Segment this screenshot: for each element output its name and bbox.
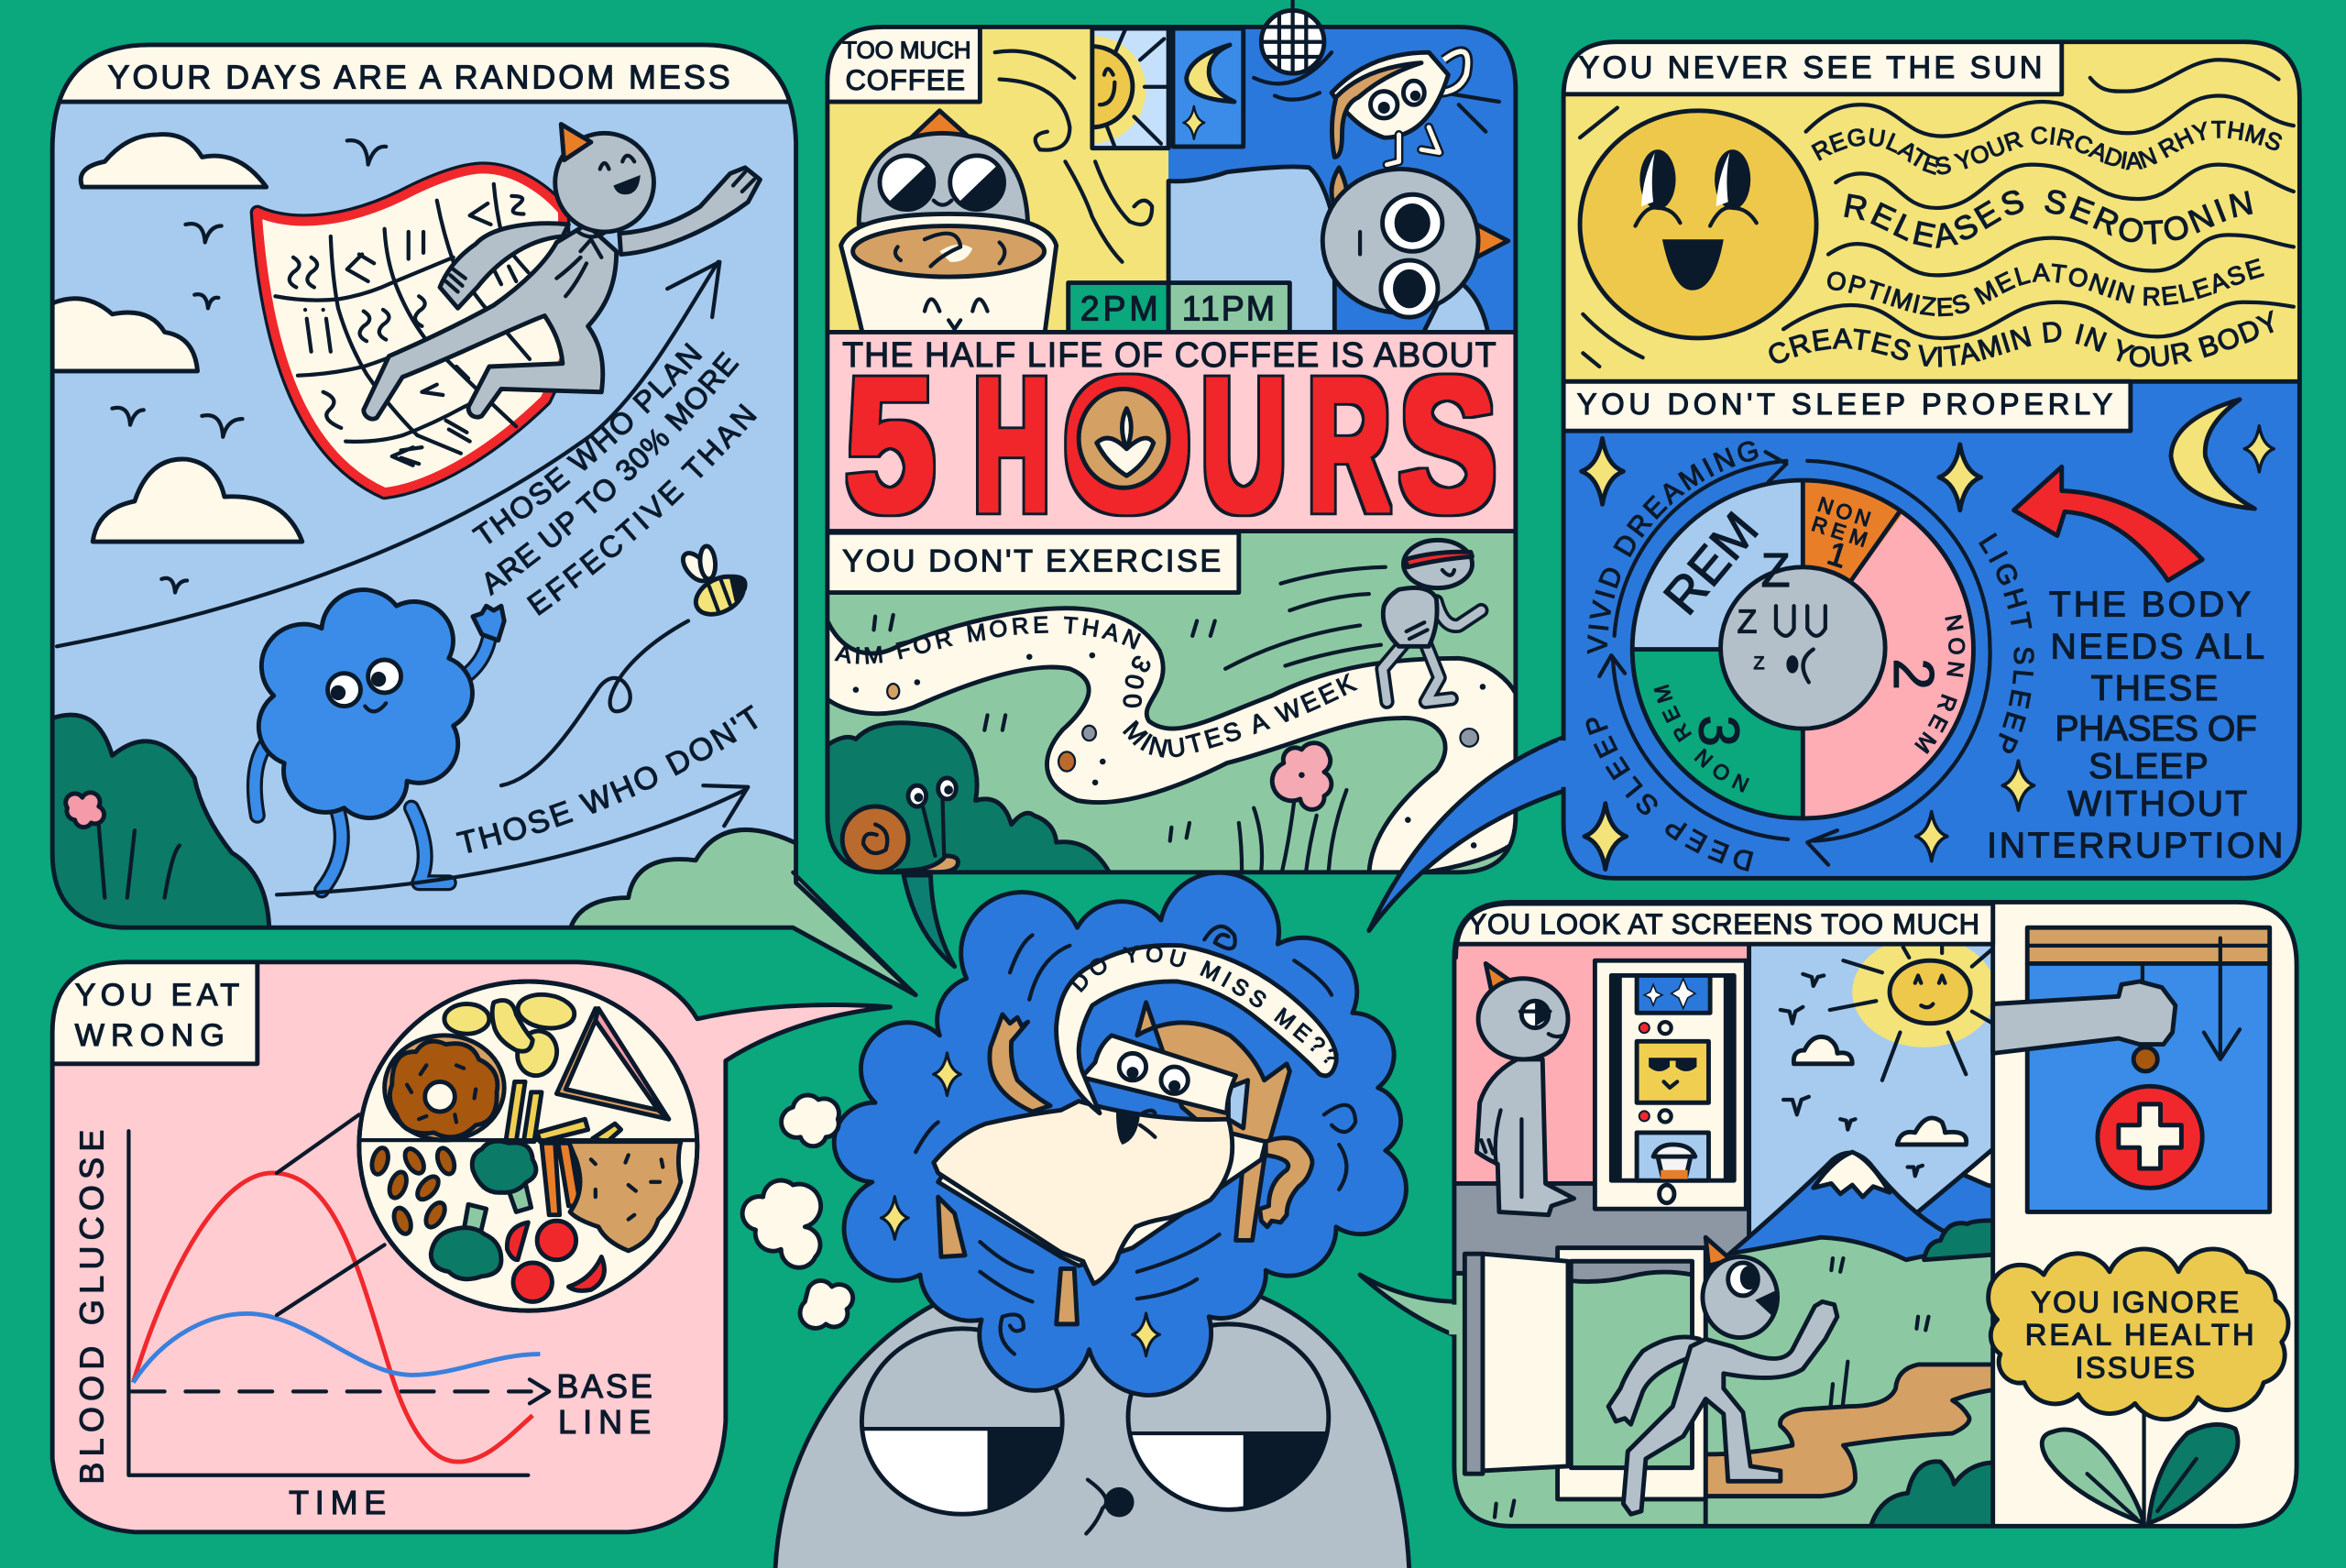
cycle labels — [1580, 435, 2038, 876]
grass ticks — [1495, 1258, 1928, 1517]
night side — [1168, 22, 1520, 332]
window blind — [2027, 927, 2270, 1212]
swirls and motion lines — [915, 927, 1355, 1354]
sun rays: wavy lines — [1580, 60, 2294, 367]
mountains — [1729, 1149, 2005, 1272]
text: the body needs all these phases: THE BODY — [2049, 586, 2251, 625]
blanket — [1168, 167, 1334, 336]
sun facts: CREATES VITAMIN D IN YOUR BODY — [1769, 310, 2275, 367]
pillow — [1081, 1036, 1236, 1113]
sleep cycle wheel: NON — [1814, 492, 1873, 532]
header: you eat wrong: WRONG — [75, 1018, 225, 1053]
callout: you ignore real health issues: ISSUES — [2075, 1351, 2195, 1385]
sun facts — [1769, 121, 2282, 367]
medical cross — [2098, 1086, 2202, 1188]
tomatoes — [507, 1221, 604, 1301]
leader lines — [277, 1114, 385, 1315]
road text: 300 — [1123, 656, 1151, 707]
ground — [1705, 1237, 2005, 1533]
header: you look at screens: YOU LOOK AT SCREENS TOO MUCH — [1468, 908, 1979, 940]
big number: 5 hours: O — [1062, 339, 1192, 551]
big arrow — [57, 262, 719, 646]
tan lump — [568, 1142, 681, 1251]
sleeping face: Z — [1761, 544, 1791, 598]
mattress — [938, 1133, 1266, 1266]
door — [1464, 1248, 1705, 1499]
latte art — [1079, 389, 1168, 488]
baseline — [132, 1390, 532, 1393]
road text — [834, 616, 1358, 758]
header: you look at screens — [1456, 904, 1993, 958]
glucose chart — [73, 1114, 652, 1521]
cloud stars — [881, 1053, 1159, 1356]
header: you never see the sun — [1556, 38, 2062, 94]
big sun face — [1580, 111, 1816, 338]
panel: you never see the sun / sleep — [1366, 39, 2302, 933]
text: the body needs all these phases: INTERRUPTION — [1987, 826, 2283, 865]
big number: 5 hours: R — [1308, 339, 1390, 552]
sleep cycle wheel: NON REM — [1913, 614, 1965, 754]
clouds — [45, 135, 302, 542]
food plate — [359, 981, 697, 1310]
disco ball — [1254, 0, 1332, 100]
panel: too much coffee — [825, 0, 1518, 874]
tail to sleep panel — [1369, 736, 1566, 930]
header: you eat wrong: YOU EAT — [75, 978, 239, 1013]
wheel labels: REM — [1652, 501, 1770, 625]
road pebbles — [853, 652, 1485, 849]
sleeping face: Z — [1738, 603, 1757, 641]
phone — [1595, 960, 1746, 1209]
carrots — [542, 1143, 580, 1215]
sleep cycle wheel — [1585, 441, 2034, 872]
panel: you look at screens too much — [1360, 898, 2308, 1533]
text: the body needs all these phases — [1987, 586, 2283, 865]
bed — [934, 1003, 1312, 1324]
glucose chart: LINE — [558, 1403, 651, 1441]
sleep cycle wheel: 2 — [1881, 658, 1945, 690]
runner — [1225, 540, 1481, 702]
header: you don't sleep properly: YOU DON'T SLEEP PROPERLY — [1577, 387, 2113, 421]
sleep cycle wheel: 1 — [1823, 533, 1852, 576]
small arrow with text: those who don't — [275, 704, 758, 896]
moon — [2171, 400, 2254, 509]
text: the body needs all these phases: NEEDS ALL — [2051, 627, 2264, 666]
header: too much coffee: TOO MUCH — [842, 37, 971, 64]
hero: figure — [364, 125, 760, 419]
big number: 5 hours: H — [974, 340, 1049, 551]
birds — [112, 140, 386, 593]
sleep cycle wheel: REM — [1809, 511, 1870, 552]
axes — [128, 1131, 528, 1475]
sun facts: RELEASES SEROTONIN — [1844, 190, 2253, 249]
window: sun — [1090, 29, 1171, 150]
room wall — [1452, 943, 1749, 1185]
callout: you ignore real health issues — [1989, 1249, 2288, 1420]
day side — [823, 22, 1168, 332]
cycle arrows — [1599, 452, 1990, 865]
bushes — [45, 715, 800, 935]
road text: MINUTES A WEEK — [1122, 673, 1358, 758]
header: too much coffee: COFFEE — [845, 64, 965, 96]
window: moon — [1173, 28, 1244, 147]
mouth — [1104, 1487, 1135, 1517]
right arm — [1260, 1138, 1312, 1227]
cycle labels: LIGHT SLEEP — [1979, 532, 2034, 753]
sleeping face: Z — [1753, 653, 1764, 674]
room floor — [1448, 1183, 1749, 1273]
big number: 5 hours — [845, 372, 1496, 517]
path — [1705, 1365, 2005, 1497]
walking character — [1608, 1237, 1837, 1514]
sun facts: OPTIMIZES MELATONIN RELEASE — [1827, 258, 2264, 317]
steam swirls — [995, 51, 1152, 262]
small grass and flower — [873, 615, 1346, 871]
red curve — [133, 1173, 532, 1462]
heading: half life of coffee: THE HALF LIFE OF COFFEE IS ABOUT — [842, 335, 1496, 374]
text: the body needs all these phases: PHASES OF — [2055, 709, 2257, 749]
text: those who plan: THOSE WHO PLAN — [471, 343, 703, 544]
header: too much coffee — [823, 22, 980, 102]
big number: 5 hours: 5 — [845, 338, 935, 551]
hero: cape calendar — [258, 169, 565, 492]
header: you eat wrong — [45, 958, 258, 1064]
tail to coffee panel — [904, 875, 955, 967]
cup character — [1332, 51, 1499, 210]
sleeping face — [1738, 544, 1825, 682]
left hand — [990, 1014, 1050, 1112]
label: 2pm: 2PM — [1080, 289, 1158, 327]
tail to screens panel — [1360, 1275, 1460, 1338]
big number: 5 hours: U — [1201, 338, 1287, 551]
bush and snail — [828, 723, 1112, 877]
label: 2pm — [1069, 283, 1168, 336]
chips — [444, 992, 576, 1080]
bed legs — [938, 1197, 965, 1256]
small arrow with text: those who don't: THOSE WHO DON'T — [455, 704, 758, 853]
beans — [369, 1146, 457, 1236]
callout: you ignore real health issues: YOU IGNORE — [2031, 1285, 2239, 1319]
left eye — [853, 1329, 1069, 1519]
header: you don't exercise: YOU DON'T EXERCISE — [842, 544, 1221, 579]
big number: 5 hours: S — [1399, 339, 1496, 552]
headboard — [1137, 1003, 1289, 1240]
header: you never see the sun: YOU NEVER SEE THE SUN — [1578, 50, 2043, 85]
speech banner: do you miss me: DO YOU MISS ME?? — [1072, 946, 1339, 1063]
text: the body needs all these phases: WITHOUT — [2067, 784, 2247, 824]
sandwich — [556, 1008, 669, 1119]
tail outlines tip: light green — [793, 872, 915, 995]
callout: you ignore real health issues: REAL HEALTH — [2025, 1318, 2254, 1352]
text: those who plan: ARE UP TO 30% MORE — [485, 351, 740, 597]
fries — [506, 1081, 621, 1142]
light green tail fill — [784, 863, 915, 995]
road text: AIM FOR MORE THAN — [834, 616, 1142, 664]
pink band: half life — [823, 332, 1526, 552]
donut — [385, 1036, 504, 1140]
cycle labels: VIVID DREAMING — [1587, 441, 1759, 654]
text: the body needs all these phases: SLEEP — [2088, 747, 2209, 786]
cycle labels: DEEP SLEEP — [1585, 718, 1754, 872]
night panel — [1556, 381, 2311, 890]
text: those who plan: EFFECTIVE THAN — [526, 403, 757, 616]
panel: your days are a random mess — [49, 42, 918, 997]
sun facts: REGULATES YOUR CIRCADIAN RHYTHMS — [1811, 121, 2282, 176]
broccoli — [431, 1141, 536, 1279]
bush — [1869, 1462, 2005, 1533]
red arrow — [2014, 466, 2202, 580]
panel: you don't exercise road — [829, 606, 1514, 871]
man looking at phone — [1476, 963, 1574, 1215]
glucose chart: BASE — [556, 1367, 652, 1405]
panel: you eat wrong — [45, 958, 890, 1532]
bee and trail — [501, 545, 750, 785]
text: the body needs all these phases: THESE — [2091, 669, 2218, 708]
heading: your days: YOUR DAYS ARE A RANDOM MESS — [108, 58, 730, 95]
right eye — [1122, 1324, 1333, 1516]
right column — [1993, 898, 2308, 1533]
sky — [1749, 943, 2003, 1256]
pillow stripe — [1228, 1080, 1248, 1128]
arm pulling cord — [1993, 981, 2176, 1071]
stars — [1582, 426, 2274, 870]
glucose chart: TIME — [289, 1484, 386, 1521]
blue curve — [133, 1313, 540, 1383]
axis labels: BLOOD GLUCOSE — [73, 1130, 111, 1485]
character: blue cloud — [255, 590, 504, 890]
label: 11pm: 11PM — [1182, 289, 1275, 327]
thought cloud — [834, 872, 1406, 1395]
sleep cycle wheel: 3 — [1687, 715, 1750, 747]
blanket — [934, 1102, 1233, 1284]
awake head — [1322, 169, 1508, 317]
smoke puffs — [742, 1095, 853, 1328]
sleepy head with coffee — [841, 111, 1057, 336]
plant leaves — [2042, 1409, 2238, 1523]
sky clouds and birds — [1781, 974, 1967, 1176]
sleep cycle wheel: NON REM — [1653, 684, 1750, 793]
label: 11pm — [1168, 283, 1289, 336]
header: you don't sleep properly — [1556, 381, 2131, 431]
character: daydreaming head — [775, 1270, 1409, 1568]
panel header strip — [45, 42, 808, 102]
sun — [1830, 937, 1996, 1080]
distant bush — [1924, 1221, 2005, 1260]
header: you don't exercise — [823, 532, 1239, 593]
